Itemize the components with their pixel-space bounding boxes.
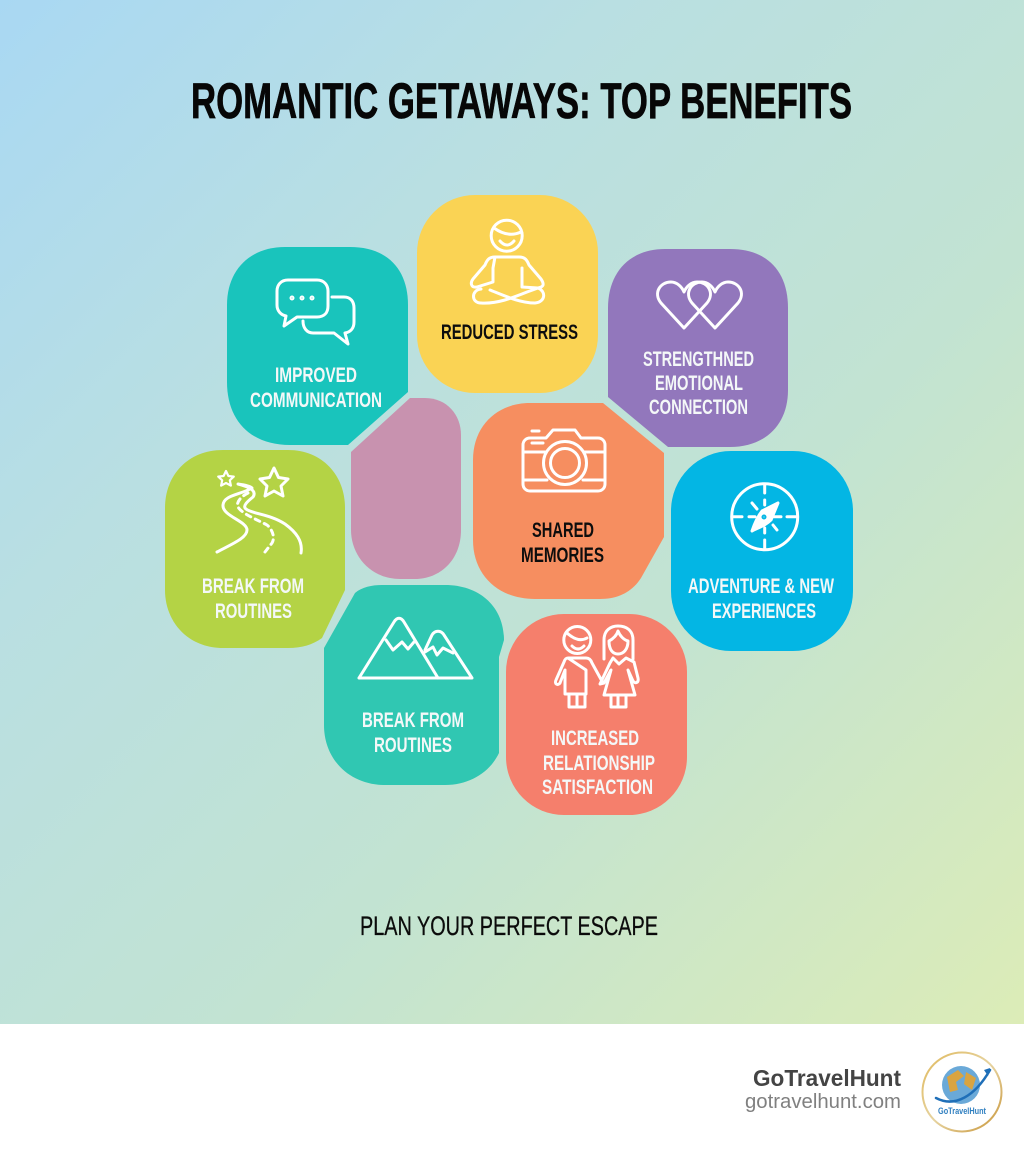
panel: increased relationship satisfaction bbox=[506, 614, 687, 815]
panel: break from routines (teal) bbox=[324, 585, 504, 785]
label: CONNECTION bbox=[649, 395, 748, 419]
label: EXPERIENCES bbox=[712, 599, 816, 623]
panel: shared memories bbox=[473, 403, 664, 599]
icon: two hearts bbox=[658, 282, 741, 328]
icon: mountains bbox=[359, 618, 472, 678]
label bbox=[688, 574, 834, 623]
brand name and url: gotravelhunt.com bbox=[745, 1090, 901, 1113]
label: ROUTINES bbox=[374, 733, 452, 757]
label: REDUCED STRESS bbox=[441, 320, 578, 344]
panel: reduced stress bbox=[417, 195, 598, 393]
label bbox=[521, 518, 604, 567]
icon: camera bbox=[523, 430, 605, 491]
panel: break from routines (lime) bbox=[165, 450, 345, 648]
icon: meditating person bbox=[471, 220, 544, 303]
tagline: PLAN YOUR PERFECT ESCAPE bbox=[360, 911, 658, 941]
logo badge bbox=[922, 1052, 1002, 1132]
label: COMMUNICATION bbox=[250, 388, 382, 412]
label: ROUTINES bbox=[215, 599, 292, 623]
label: SATISFACTION bbox=[542, 775, 653, 799]
icon: couple holding hands bbox=[555, 626, 638, 707]
icon: chat bubbles bbox=[277, 280, 354, 344]
label: INCREASED bbox=[551, 726, 639, 750]
icon: winding road and stars bbox=[217, 468, 301, 553]
label bbox=[643, 347, 754, 419]
label bbox=[202, 574, 304, 623]
panel: improved communication bbox=[227, 247, 408, 445]
label: MEMORIES bbox=[521, 543, 604, 567]
icon: compass bbox=[732, 484, 798, 550]
label bbox=[542, 726, 655, 799]
panel: adventure and new experiences bbox=[671, 451, 853, 651]
label: IMPROVED bbox=[275, 363, 357, 387]
panel: blank pink bbox=[351, 398, 461, 579]
panel: strengthened emotional connection bbox=[608, 249, 788, 447]
icon: globe bbox=[936, 1066, 990, 1104]
brand name and url: GoTravelHunt bbox=[753, 1065, 901, 1091]
brand name and url bbox=[745, 1065, 901, 1113]
label: EMOTIONAL bbox=[655, 371, 743, 395]
label: RELATIONSHIP bbox=[543, 751, 655, 775]
label bbox=[362, 708, 464, 757]
label: STRENGTHNED bbox=[643, 347, 754, 371]
label: ADVENTURE & NEW bbox=[688, 574, 834, 598]
logo text: GoTravelHunt bbox=[938, 1106, 986, 1116]
label: BREAK FROM bbox=[202, 574, 304, 598]
label: SHARED bbox=[532, 518, 594, 542]
label: BREAK FROM bbox=[362, 708, 464, 732]
label bbox=[250, 363, 382, 412]
